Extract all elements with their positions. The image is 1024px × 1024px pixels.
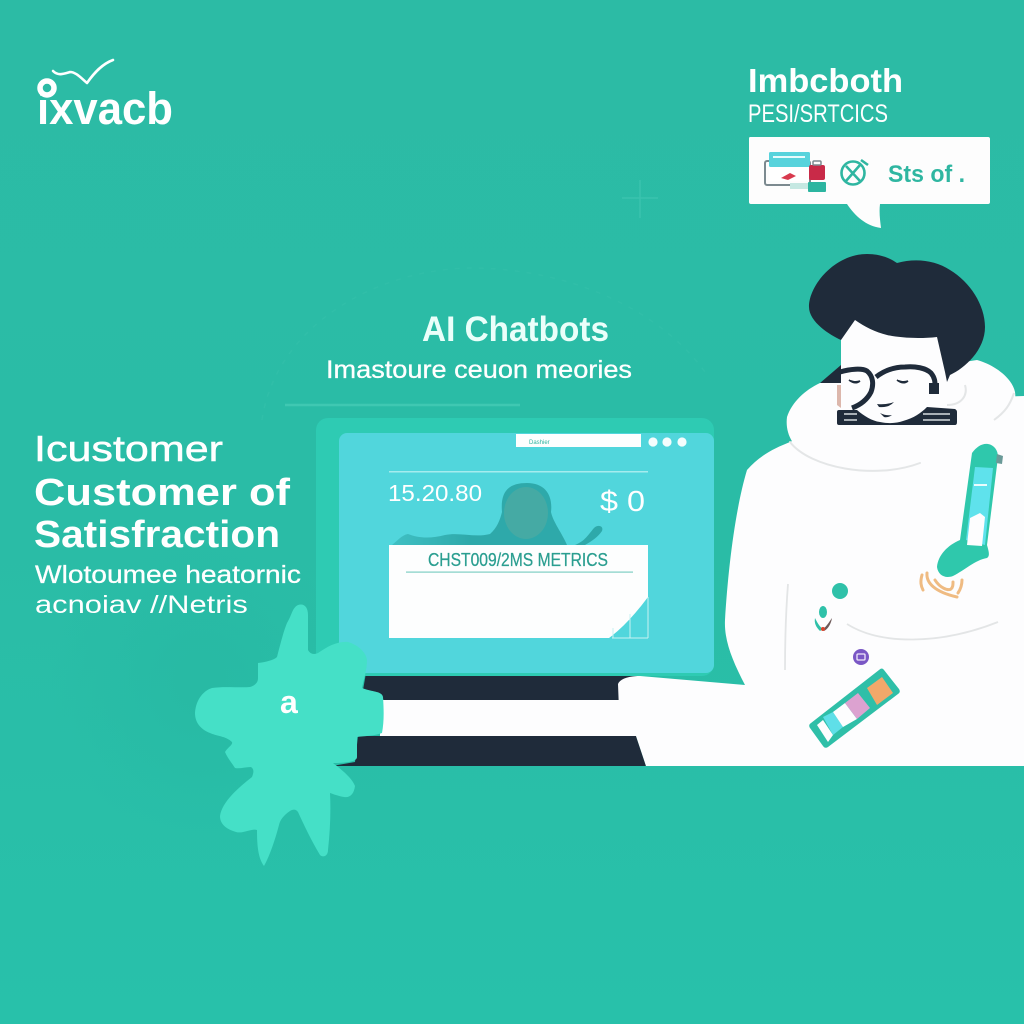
icon: circle mark <box>842 160 868 184</box>
address bar: Dashier <box>529 440 550 446</box>
mini bar chart <box>609 597 648 638</box>
heading: AI Chatbots: AI Chatbots <box>422 310 609 349</box>
glasses temple block <box>929 383 939 394</box>
face details <box>849 380 908 417</box>
monitor frame <box>316 418 714 676</box>
left text block <box>34 428 301 589</box>
logo wordmark: ixvacb <box>37 83 173 134</box>
keyboard white band <box>380 700 650 736</box>
silhouette on screen <box>392 483 602 545</box>
hair <box>809 254 985 382</box>
ear shadow <box>837 385 841 408</box>
splash blob <box>195 604 384 866</box>
collar shading <box>790 385 1014 471</box>
metrics panel title: CHST009/2MS METRICS <box>428 550 608 570</box>
blob glyph: a <box>280 684 298 720</box>
person <box>618 254 1024 766</box>
glasses <box>840 367 935 408</box>
center heading <box>326 310 632 384</box>
left heading line 1: Icustomer <box>34 428 223 469</box>
left body line 2: acnoiav //Netris <box>35 591 248 619</box>
speech bubble callout <box>749 137 990 228</box>
laptop base <box>332 673 650 766</box>
teal dot <box>832 583 848 599</box>
left body line 1: Wlotoumee heatornic <box>35 561 301 589</box>
purple badge <box>853 649 869 665</box>
person scarf collar <box>787 360 1015 472</box>
bubble shape <box>749 137 990 228</box>
chin bar <box>837 407 957 425</box>
icon: devices <box>765 152 826 192</box>
body crease lines <box>785 584 998 670</box>
top right heading <box>748 62 903 128</box>
metric value left: 15.20.80 <box>388 480 482 506</box>
window dots <box>648 437 687 447</box>
bubble text: Sts of . <box>888 161 965 188</box>
left heading line 2: Customer of <box>34 472 290 514</box>
heading subtitle: PESI/SRTCICS <box>748 100 888 128</box>
hand squiggle <box>921 573 962 597</box>
keyboard lower deck <box>332 736 646 766</box>
pen and hand <box>937 444 1003 577</box>
colour swatch card <box>809 668 900 748</box>
heading title: Imbcboth <box>748 62 903 99</box>
chin bar stripes <box>844 414 950 420</box>
metric value right: $ 0 <box>600 486 645 518</box>
center subtitle: Imastoure ceuon meories <box>326 356 632 384</box>
small plant icon <box>815 606 832 631</box>
face <box>841 318 947 424</box>
logo check mark <box>53 60 113 83</box>
neck hair wisp <box>820 365 841 383</box>
left heading line 3: Satisfraction <box>34 514 280 556</box>
address bar <box>516 434 641 447</box>
monitor <box>316 418 714 676</box>
person body <box>618 396 1024 766</box>
keyboard upper deck <box>363 673 640 700</box>
metrics panel <box>389 545 648 638</box>
logo ring dot <box>40 81 54 95</box>
logo <box>37 60 173 134</box>
monitor screen <box>339 433 714 673</box>
